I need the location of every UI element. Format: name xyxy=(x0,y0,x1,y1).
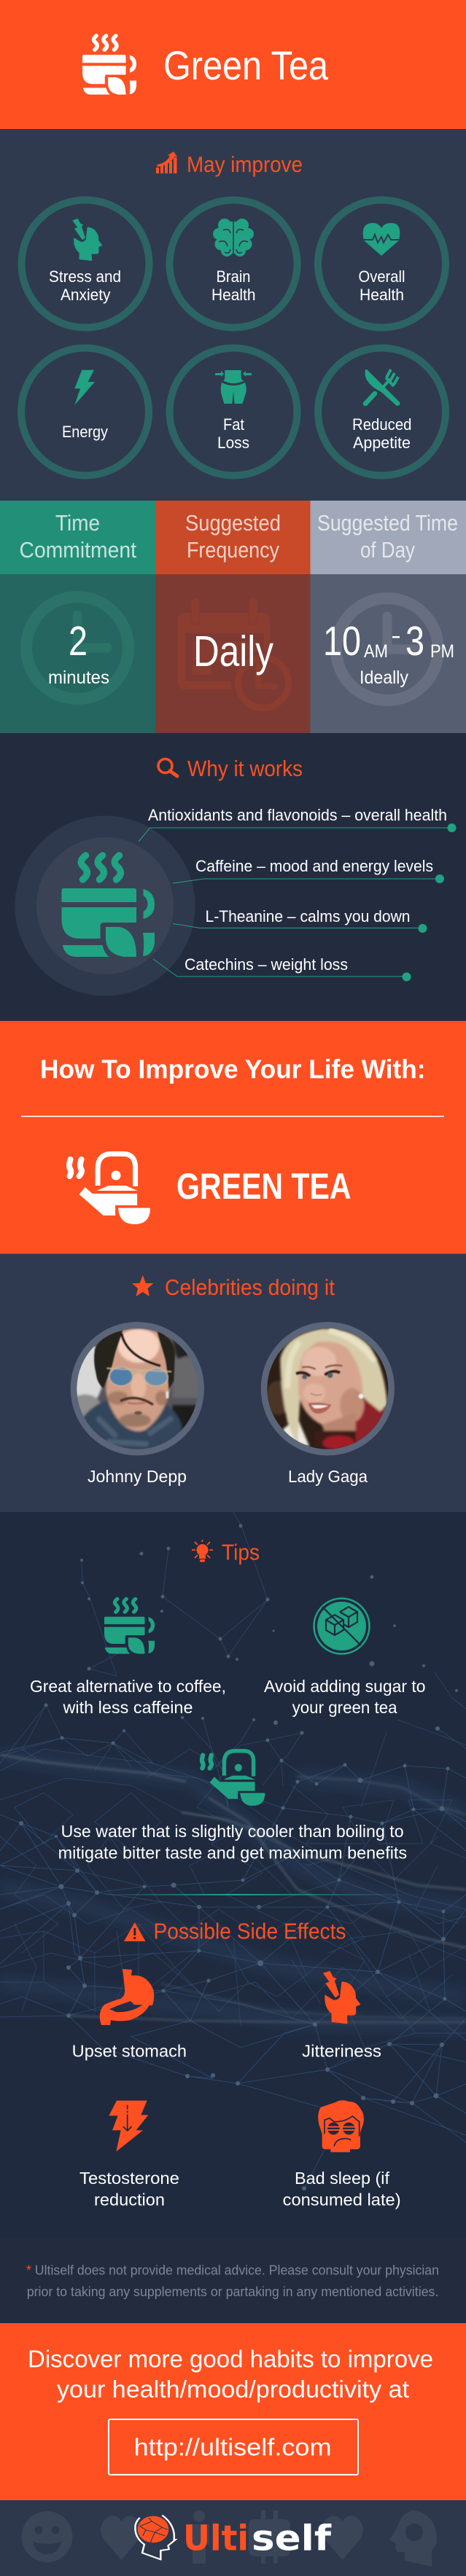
panel: disclaimer: * Ultiself does not provide medical advice. Please consult your physician xyxy=(26,2263,439,2278)
side effect: testosterone reduction xyxy=(79,2101,179,2209)
icon: lightning bolt xyxy=(74,370,95,405)
logo xyxy=(135,2516,332,2559)
panel: call to action: your health/mood/productivity at xyxy=(57,2376,409,2403)
ingredient: antioxidants xyxy=(139,806,457,842)
heading: how to improve your life: How To Improve Your Life With: xyxy=(40,1054,426,1084)
benefit: energy: Energy xyxy=(62,423,108,441)
icon: rising bars xyxy=(156,152,177,173)
icon: tea cup xyxy=(82,36,136,95)
panel: suggested time of day: of Day xyxy=(360,537,415,563)
panel: disclaimer xyxy=(0,2237,466,2323)
benefit: energy xyxy=(21,348,149,475)
tip: cooler water: mitigate bitter taste and get maximum benefits xyxy=(58,1844,407,1863)
panel: call to action xyxy=(0,2323,466,2500)
icon: stomach xyxy=(100,1969,154,2025)
benefit: overall health xyxy=(318,200,446,328)
panel: suggested frequency: Suggested xyxy=(185,510,281,536)
tip: avoid sugar: Avoid adding sugar to xyxy=(264,1677,426,1696)
icon: head with bolt xyxy=(72,219,102,261)
portrait: lady gaga xyxy=(261,1322,395,1455)
tip: cooler water: Use water that is slightly cooler than boiling to xyxy=(61,1822,404,1841)
benefit: overall health: Overall xyxy=(359,267,405,286)
panel: tips and side effects background xyxy=(0,1512,466,2237)
heading: tips: Tips xyxy=(222,1540,260,1565)
icon: waist xyxy=(215,370,252,404)
panel: may improve xyxy=(0,129,466,501)
tip: alternative to coffee: with less caffeine xyxy=(62,1698,193,1717)
habit name: GREEN TEA xyxy=(176,1166,352,1207)
icon: magnifier xyxy=(158,759,177,776)
ingredient: antioxidants: Antioxidants and flavonoids – overall health xyxy=(148,806,447,824)
icon: tired face xyxy=(318,2100,364,2152)
logo: Ulti xyxy=(183,2518,249,2559)
name: lady gaga: Lady Gaga xyxy=(288,1467,368,1486)
panel: suggested frequency: Daily xyxy=(193,627,273,676)
benefit: stress and anxiety: Stress and xyxy=(49,267,121,286)
benefit: stress and anxiety xyxy=(22,200,149,328)
benefit: brain health: Health xyxy=(211,286,255,304)
side effect: testosterone reduction: Testosterone xyxy=(79,2169,179,2188)
icon: clock xyxy=(336,598,438,700)
title: Green Tea xyxy=(163,42,329,88)
portrait: johnny depp xyxy=(69,1322,204,1455)
tip: avoid sugar: your green tea xyxy=(292,1698,397,1717)
side effect: bad sleep: Bad sleep (if xyxy=(295,2169,390,2188)
ingredient: catechins: Catechins – weight loss xyxy=(185,955,348,974)
panel: time commitment: 2 xyxy=(69,618,88,665)
faded background icons xyxy=(22,2510,437,2567)
panel: suggested time of day xyxy=(311,501,466,733)
benefit: fat loss: Fat xyxy=(223,415,244,434)
side effect: upset stomach: Upset stomach xyxy=(72,2042,187,2061)
icon: knife and fork xyxy=(365,369,400,406)
header panel xyxy=(0,0,466,129)
panel: call to action: Discover more good habits to improve xyxy=(28,2346,433,2373)
ingredient: l-theanine: L-Theanine – calms you down xyxy=(206,907,410,925)
panel: possible side effects xyxy=(72,1919,401,2209)
icon: tea cup xyxy=(104,1599,155,1653)
panel: suggested time of day: AM xyxy=(364,641,388,662)
panel: how to improve xyxy=(0,1021,466,1253)
side effect: jitteriness xyxy=(302,1971,381,2061)
icon: calendar with clock xyxy=(178,598,295,715)
panel: footer xyxy=(0,2500,466,2576)
panel: suggested frequency: Frequency xyxy=(187,537,279,563)
panel: suggested time of day: Ideally xyxy=(360,668,408,688)
side effect: testosterone reduction: reduction xyxy=(94,2190,165,2209)
icon: teapot xyxy=(69,1154,150,1224)
ingredient: l-theanine xyxy=(173,907,427,933)
benefit: overall health: Health xyxy=(360,286,404,304)
ingredient: caffeine xyxy=(173,857,444,883)
icon: star xyxy=(132,1275,153,1296)
logo: self xyxy=(252,2518,332,2559)
panel: suggested time of day: PM xyxy=(430,641,454,662)
panel: time commitment: Commitment xyxy=(19,537,136,563)
panel: time commitment: minutes xyxy=(48,668,109,688)
panel: suggested time of day: 3 xyxy=(405,618,424,665)
benefit: brain health xyxy=(169,200,298,328)
icon: teapot xyxy=(202,1751,265,1806)
panel: suggested time of day: 10 xyxy=(323,618,361,665)
panel: suggested frequency xyxy=(155,501,311,733)
tip: cooler water xyxy=(58,1751,407,1863)
link button xyxy=(109,2419,358,2475)
panel: time commitment xyxy=(0,501,155,733)
icon: heart with pulse xyxy=(362,223,400,256)
benefit: fat loss: Loss xyxy=(217,434,249,452)
heading: possible side effects: Possible Side Effects xyxy=(153,1919,346,1944)
side effect: jitteriness: Jitteriness xyxy=(302,2042,381,2061)
icon: no sugar xyxy=(314,1599,369,1654)
ingredient: caffeine: Caffeine – mood and energy levels xyxy=(195,857,433,875)
side effect: bad sleep: consumed late) xyxy=(283,2190,401,2209)
icon: bolt with arrow xyxy=(109,2101,148,2152)
panel: time commitment: Time xyxy=(55,510,100,536)
benefit: reduced appetite: Appetite xyxy=(353,434,411,452)
icon: brain head xyxy=(135,2516,176,2559)
icon: clock xyxy=(26,597,128,699)
icon: brain xyxy=(213,219,254,257)
icon: light bulb xyxy=(192,1540,213,1562)
heading: may improve: May improve xyxy=(187,152,303,177)
tip: avoid sugar xyxy=(264,1599,426,1717)
benefit: reduced appetite xyxy=(318,348,446,475)
heading: celebrities: Celebrities doing it xyxy=(165,1275,335,1300)
benefit: fat loss xyxy=(169,348,298,475)
tea cup badge xyxy=(15,816,195,995)
side effect: upset stomach xyxy=(72,1969,187,2061)
panel: tips xyxy=(30,1540,426,1863)
benefit: reduced appetite: Reduced xyxy=(352,415,411,434)
ingredient: catechins xyxy=(153,955,411,981)
tip: alternative to coffee xyxy=(30,1599,226,1717)
link button: http://ultiself.com xyxy=(134,2434,332,2461)
benefit: stress and anxiety: Anxiety xyxy=(61,286,111,304)
panel: why it works xyxy=(0,733,466,1021)
icon: head with bolt xyxy=(323,1971,360,2024)
panel: disclaimer: prior to taking any supplements or partaking in any mentioned activities. xyxy=(27,2285,438,2299)
side effect: bad sleep xyxy=(283,2100,401,2209)
icon: tea cup xyxy=(61,856,155,957)
name: johnny depp: Johnny Depp xyxy=(88,1467,187,1486)
benefit: brain health: Brain xyxy=(216,267,251,286)
panel: celebrities xyxy=(70,1275,395,1486)
heading: why it works: Why it works xyxy=(187,756,303,781)
icon: warning triangle xyxy=(124,1922,146,1941)
tip: alternative to coffee: Great alternative to coffee, xyxy=(30,1677,226,1696)
